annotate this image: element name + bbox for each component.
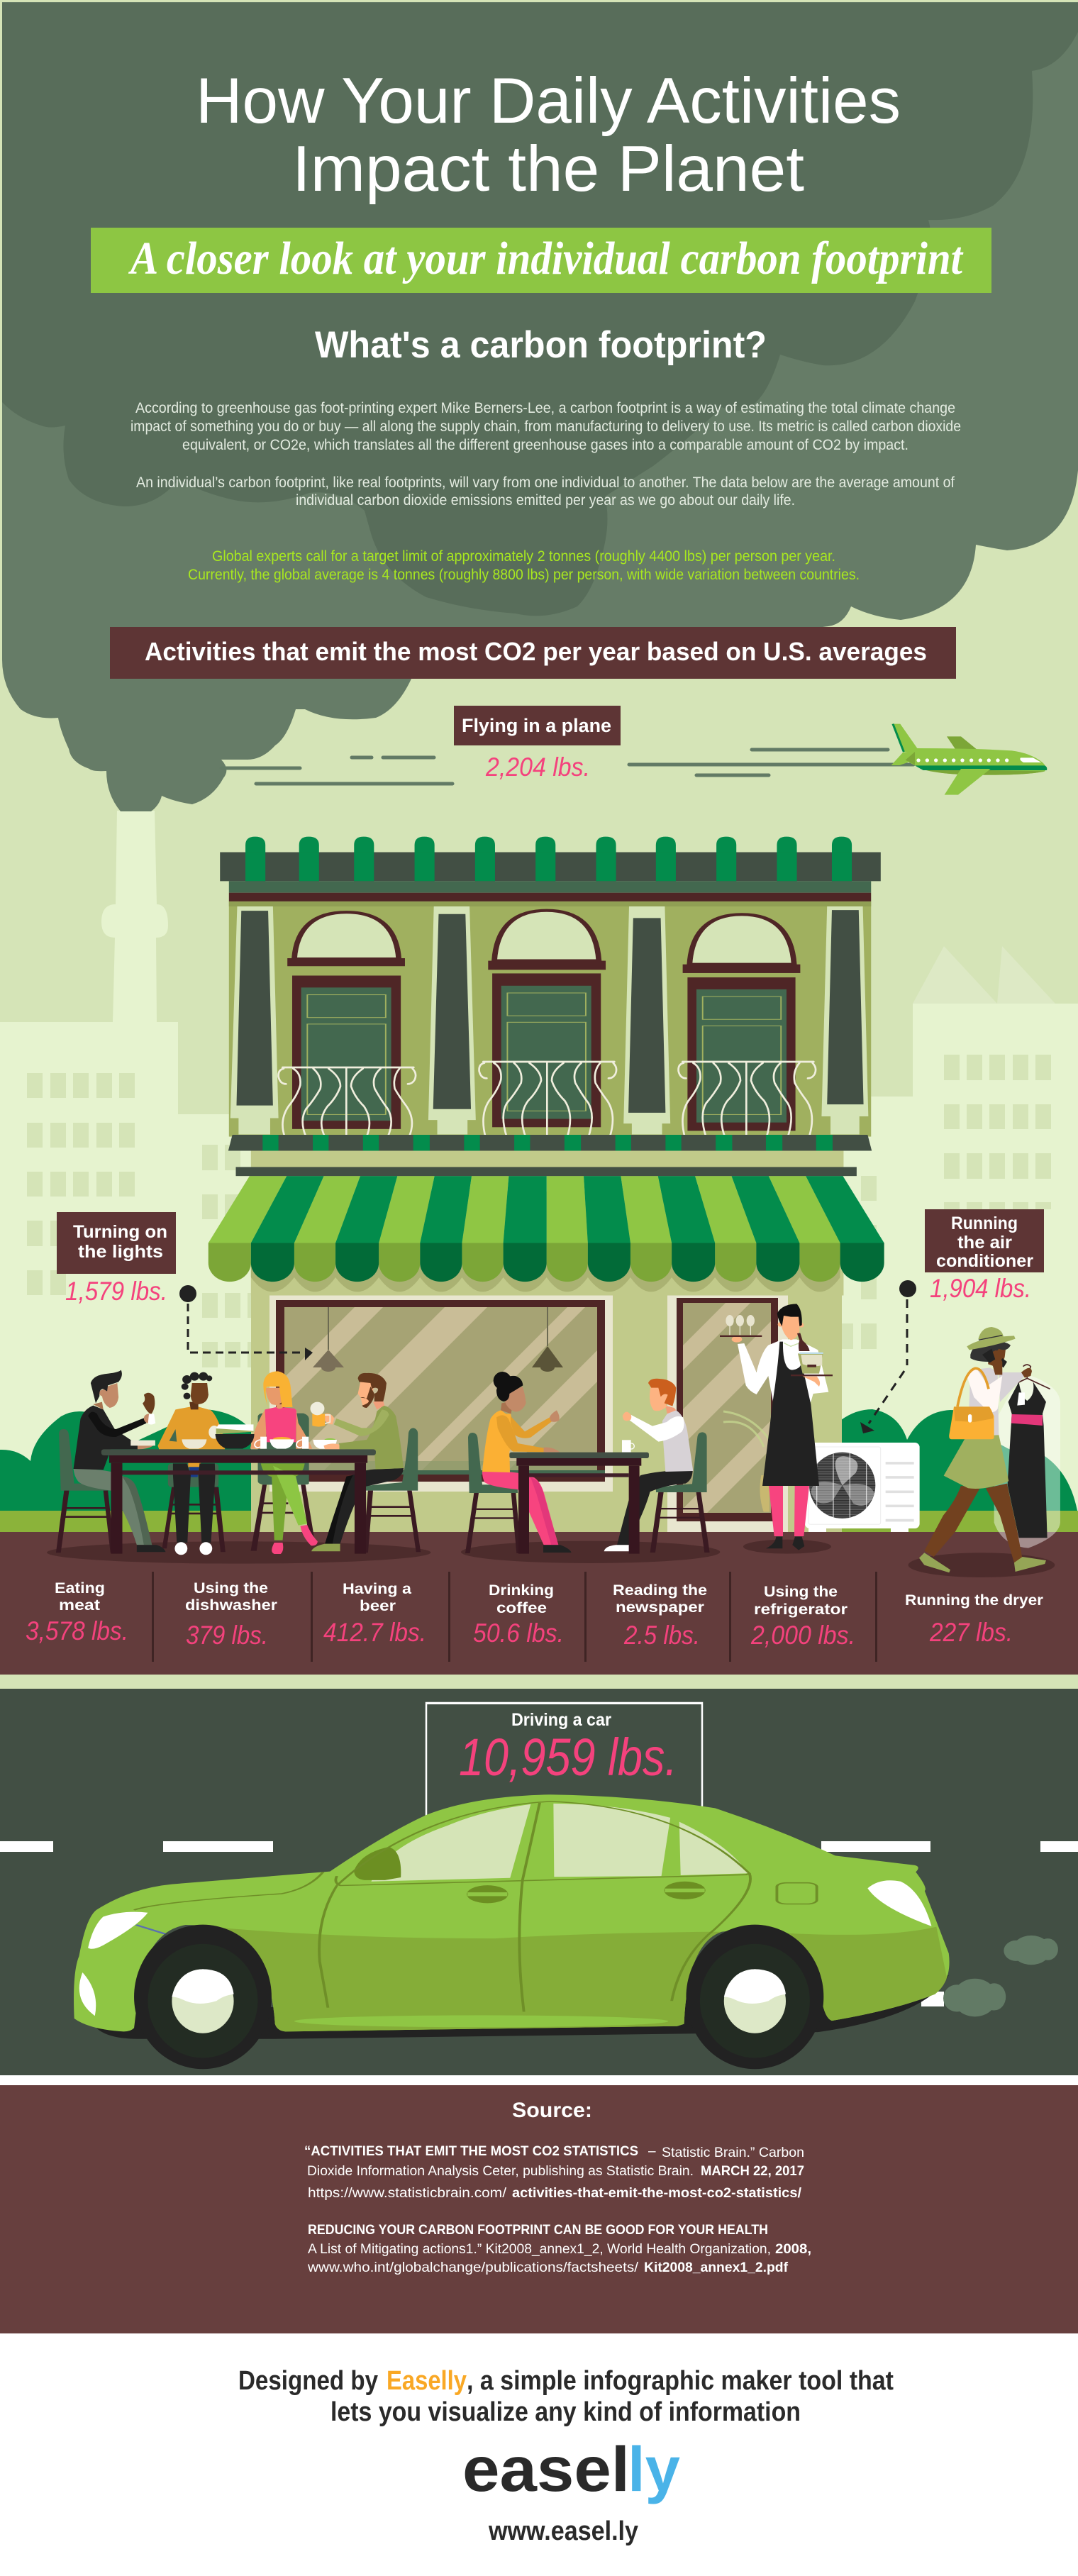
- smoke cloud: light layer: [2, 2, 1078, 811]
- stat: using the refrigerator: [750, 1584, 855, 1650]
- easelly logo: easel: [462, 2433, 630, 2504]
- callout: turning on the lights: Turning on: [73, 1222, 167, 1242]
- intro text: An individual’s carbon footprint, like real footprints, will vary from one individual to another. The data below are the average amount of: [136, 474, 955, 491]
- callout: turning on the lights: [57, 1212, 176, 1306]
- intro text: equivalent, or CO2e, which translates all the different greenhouse gases into a comparable amount of CO2 by impact.: [182, 437, 908, 453]
- woman with dry-cleaning: [908, 1327, 1060, 1577]
- citation 2: A List of Mitigating actions1.” Kit2008_annex1_2, World Health Organization,: [308, 2242, 771, 2257]
- stat: using the dishwasher: dishwasher: [185, 1597, 277, 1614]
- table: [509, 1453, 649, 1554]
- roof finials: [245, 837, 852, 881]
- awning stripes: [209, 1176, 884, 1282]
- easelly logo: ly: [628, 2433, 680, 2504]
- intro text: [130, 400, 961, 509]
- footer: [0, 2333, 1078, 2576]
- designed by line: lets you visualize any kind of information: [330, 2397, 801, 2427]
- callout: running the air conditioner: the air: [957, 1233, 1012, 1253]
- bushes and grass: [0, 1409, 1078, 1532]
- stat: eating meat: [26, 1580, 128, 1645]
- front wheel: [134, 1925, 272, 2069]
- stat: running the dryer: Running the dryer: [905, 1592, 1043, 1609]
- citation 2: [307, 2223, 811, 2275]
- stat: reading the newspaper: Reading the: [613, 1582, 707, 1599]
- diner: woman in orange top: [157, 1372, 226, 1555]
- target limit note: Currently, the global average is 4 tonnes (roughly 8800 lbs) per person, with wide variation between countries.: [188, 567, 860, 583]
- label: flying in a plane: Flying in a plane: [462, 715, 611, 736]
- rear wheel: [686, 1925, 823, 2069]
- source panel: Source:: [512, 2099, 592, 2122]
- source panel: [0, 2085, 1078, 2333]
- stat: having a beer: [323, 1581, 426, 1647]
- stat: reading the newspaper: 2.5 lbs.: [623, 1621, 700, 1650]
- intro text: impact of something you do or buy — all along the supply chain, from manufacturing to delivery to use. Its metric is called carbon dioxide: [130, 418, 961, 435]
- website: www.easel.ly: [488, 2516, 638, 2546]
- speed lines: [221, 750, 913, 784]
- car: [74, 1794, 1058, 2069]
- diner: woman in yellow: [465, 1372, 572, 1553]
- banner: activities heading: [110, 627, 956, 679]
- ground: [0, 1532, 1078, 1675]
- cafe door: [667, 1295, 788, 1532]
- diner: bearded man with beer: [310, 1373, 421, 1553]
- designed by line: Easelly: [387, 2366, 467, 2396]
- stat: using the dishwasher: 379 lbs.: [186, 1621, 268, 1650]
- callout: turning on the lights: the lights: [78, 1242, 163, 1262]
- citation 1: –: [648, 2144, 656, 2159]
- citation 2: 2008,: [775, 2242, 811, 2257]
- icon: airplane: [891, 724, 1047, 795]
- callout: driving a car: Driving a car: [511, 1710, 611, 1730]
- stat: eating meat: meat: [59, 1597, 100, 1614]
- cafe ground floor wall: [251, 1192, 842, 1532]
- citation 1: Statistic Brain.” Carbon: [662, 2145, 804, 2160]
- designed by line: , a simple infographic maker tool that: [467, 2366, 894, 2396]
- stat: using the refrigerator: Using the: [764, 1584, 838, 1600]
- stat: having a beer: 412.7 lbs.: [323, 1618, 426, 1647]
- callout: running the air conditioner: Running: [951, 1214, 1018, 1233]
- diner: man eating chicken: [56, 1370, 166, 1553]
- label: flying in a plane: 2,204 lbs.: [485, 753, 590, 782]
- upper floor building: [220, 837, 881, 1137]
- stat: having a beer: beer: [360, 1598, 396, 1614]
- stat: using the refrigerator: refrigerator: [754, 1601, 848, 1618]
- stat: drinking coffee: 50.6 lbs.: [473, 1619, 564, 1648]
- air conditioner unit: [805, 1443, 920, 1532]
- window middle: [488, 911, 606, 1127]
- citation 1: MARCH 22, 2017: [701, 2164, 804, 2179]
- citation 2: www.who.int/globalchange/publications/factsheets/: [307, 2260, 639, 2275]
- banner: activities heading: Activities that emit the most CO2 per year based on U.S. averages: [145, 637, 927, 666]
- exhaust smoke: [943, 1936, 1058, 2016]
- callout: turning on the lights: 1,579 lbs.: [65, 1277, 167, 1306]
- car lights: [79, 1880, 932, 2016]
- citation 1: Dioxide Information Analysis Ceter, publishing as Statistic Brain.: [307, 2164, 694, 2179]
- main title: [196, 65, 901, 205]
- window left: [287, 912, 405, 1129]
- main title: How Your Daily Activities: [196, 65, 901, 137]
- diner: blonde woman in pink: [250, 1371, 318, 1554]
- awning scallop shadow: [251, 1260, 843, 1296]
- city silhouette: [0, 811, 1078, 1539]
- callout: running the air conditioner: [925, 1209, 1044, 1303]
- stat: running the dryer: [905, 1592, 1043, 1647]
- label: flying in a plane: [454, 706, 621, 782]
- stat: drinking coffee: coffee: [496, 1600, 547, 1616]
- dress in garment bag: [994, 1365, 1060, 1548]
- stat: eating meat: 3,578 lbs.: [26, 1616, 128, 1645]
- citation 2: Kit2008_annex1_2.pdf: [644, 2260, 789, 2275]
- stat: using the dishwasher: Using the: [194, 1580, 268, 1597]
- pendant lamp right: [532, 1307, 563, 1372]
- diner: man in grey vest: [604, 1379, 710, 1553]
- balcony railings: [279, 1062, 816, 1138]
- stat: drinking coffee: [473, 1582, 564, 1648]
- waiter: [720, 1304, 833, 1554]
- citation 1: https://www.statisticbrain.com/: [308, 2186, 507, 2201]
- ledge and awning: [209, 1135, 884, 1296]
- roof band: [220, 853, 881, 901]
- table dishes: [182, 1424, 340, 1449]
- stat: running the dryer: 227 lbs.: [929, 1618, 1013, 1647]
- citation 2: REDUCING YOUR CARBON FOOTPRINT CAN BE GOOD FOR YOUR HEALTH: [308, 2223, 768, 2238]
- cafe window: [270, 1295, 613, 1492]
- air conditioner and waiter: [720, 1304, 920, 1554]
- subtitle band: A closer look at your individual carbon footprint: [128, 233, 963, 284]
- designed by line: Designed by: [238, 2366, 378, 2396]
- arrow: air conditioner: [860, 1280, 916, 1433]
- window right: [683, 914, 800, 1131]
- callout: driving a car: [426, 1702, 703, 1823]
- left table with four diners: [47, 1370, 430, 1564]
- stat: drinking coffee: Drinking: [489, 1582, 554, 1599]
- intro text: According to greenhouse gas foot-printing expert Mike Berners-Lee, a carbon footprint is a way of estimating the total climate change: [135, 400, 955, 416]
- car windows: [371, 1804, 748, 1882]
- pendant lamp left: [313, 1307, 344, 1372]
- coffee cup: [622, 1440, 634, 1453]
- stat: using the dishwasher: [185, 1580, 277, 1650]
- callout: running the air conditioner: 1,904 lbs.: [930, 1274, 1031, 1303]
- citation 1: “ACTIVITIES THAT EMIT THE MOST CO2 STATISTICS: [304, 2144, 638, 2159]
- road: [0, 1689, 1078, 2085]
- stat: having a beer: Having a: [343, 1581, 411, 1597]
- smoke cloud: dark layer: [2, 3, 1078, 616]
- heading: what's a carbon footprint: What's a carbon footprint?: [315, 324, 767, 366]
- target limit note: Global experts call for a target limit of approximately 2 tonnes (roughly 4400 lbs) per person per year.: [212, 548, 835, 565]
- right table with two diners: [461, 1372, 720, 1563]
- pilasters: [230, 906, 868, 1134]
- stat: reading the newspaper: [613, 1582, 707, 1650]
- table: [101, 1449, 376, 1554]
- stat: using the refrigerator: 2,000 lbs.: [750, 1621, 855, 1650]
- column dividers: [152, 1572, 877, 1662]
- arrow: lights: [179, 1285, 313, 1360]
- stat: reading the newspaper: newspaper: [616, 1599, 704, 1616]
- citation 1: [304, 2144, 804, 2201]
- citation 1: activities-that-emit-the-most-co2-statistics/: [512, 2186, 802, 2201]
- stat: eating meat: Eating: [55, 1580, 105, 1597]
- callout: driving a car: 10,959 lbs.: [459, 1728, 677, 1787]
- designed by line: [238, 2366, 894, 2427]
- target limit note: [188, 548, 860, 583]
- main title: Impact the Planet: [292, 133, 804, 205]
- intro text: individual carbon dioxide emissions emitted per year as we go about our daily life.: [296, 492, 795, 509]
- callout: running the air conditioner: conditioner: [936, 1251, 1033, 1271]
